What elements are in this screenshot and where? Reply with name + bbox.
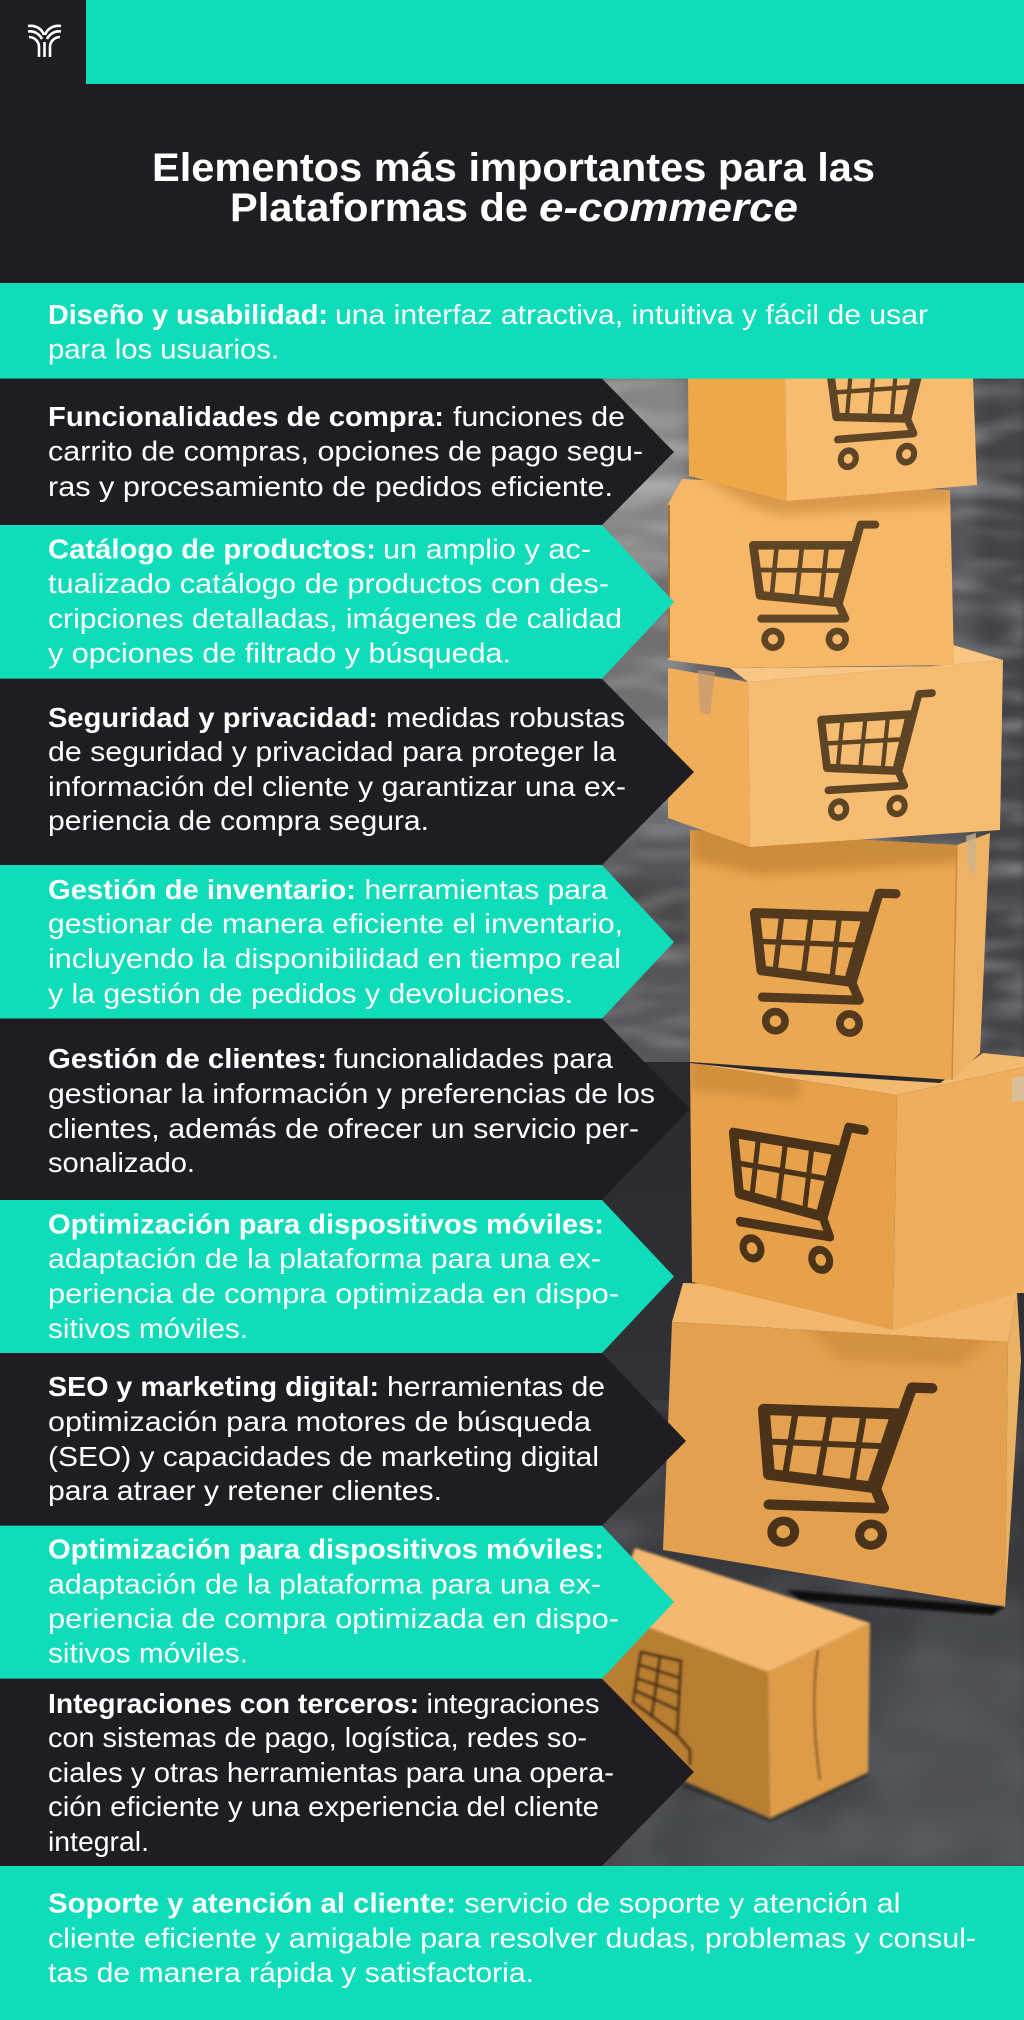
panel: SEO y marketing digital [0, 1353, 686, 1526]
box 3: box with cart facing right [668, 645, 1003, 847]
text: Diseño y usabilidad: Diseño y usabilidad: [48, 299, 328, 330]
text: Integraciones con terceros: con sistemas de pago, logística, redes so- [48, 1722, 587, 1753]
text: Optimización para dispositivos móviles (repetido): Optimización para dispositivos móviles: [48, 1534, 604, 1564]
text: Diseño y usabilidad: para los usuarios. [48, 334, 279, 365]
text: Integraciones con terceros [48, 1688, 614, 1857]
text: Optimización para dispositivos móviles (repetido): periencia de compra optimizada en dispo- [48, 1603, 619, 1634]
text: Optimización para dispositivos móviles: Optimización para dispositivos móviles: [48, 1209, 604, 1240]
panel: Gestión de inventario [0, 865, 674, 1018]
text: Catálogo de productos: cripciones detalladas, imágenes de calidad [48, 603, 622, 634]
photo background: blurred wood wall [590, 370, 1024, 1070]
text: SEO y marketing digital: optimización para motores de búsqueda [48, 1406, 592, 1437]
text: Soporte y atención al cliente: servicio de soporte y atención al [464, 1887, 900, 1918]
text: Catálogo de productos [48, 534, 622, 669]
title: Elementos más importantes para las [152, 146, 875, 190]
text: Gestión de clientes: sonalizado. [48, 1147, 195, 1178]
panel: Soporte y atención al cliente [0, 1866, 1024, 2020]
icon: cart on box 2 [753, 525, 875, 648]
shading under box 4 [690, 1064, 802, 1100]
text: Soporte y atención al cliente: Soporte y atención al cliente: [48, 1887, 456, 1918]
table haze [725, 1641, 1024, 1857]
text: Gestión de clientes: Gestión de clientes: [48, 1043, 327, 1074]
panel: Seguridad y privacidad [0, 679, 694, 865]
title: Plataformas de [230, 186, 528, 230]
icon: logo [28, 26, 61, 57]
text: SEO y marketing digital: (SEO) y capacidades de marketing digital [48, 1441, 599, 1472]
text: Gestión de inventario: y la gestión de pedidos y devoluciones. [48, 978, 573, 1009]
icon: cart on box 1 [827, 378, 922, 470]
text: Catálogo de productos: y opciones de filtrado y búsqueda. [48, 638, 511, 669]
text: Seguridad y privacidad: información del cliente y garantizar una ex- [48, 771, 626, 802]
text: Optimización para dispositivos móviles [48, 1209, 619, 1344]
title [152, 146, 875, 230]
panel: Catálogo de productos [0, 525, 674, 679]
text: Gestión de clientes [48, 1043, 655, 1178]
text: Seguridad y privacidad: medidas robustas [386, 702, 625, 733]
text: Optimización para dispositivos móviles: sitivos móviles. [48, 1313, 248, 1344]
box 5: second box from the bottom [690, 1050, 1024, 1330]
box 1: top box cropped by the band [688, 378, 977, 501]
text: Integraciones con terceros: integraciones [426, 1688, 600, 1719]
shading under box 5 [810, 1330, 986, 1365]
text: Optimización para dispositivos móviles: adaptación de la plataforma para una ex- [48, 1243, 601, 1274]
text: Gestión de clientes: clientes, además de ofrecer un servicio per- [48, 1113, 639, 1144]
text: Optimización para dispositivos móviles (repetido) [48, 1534, 619, 1669]
box 6: large bottom box [663, 1283, 1021, 1615]
panel: Funcionalidades de compra [0, 379, 674, 525]
text: Seguridad y privacidad: periencia de compra segura. [48, 805, 429, 836]
text: Seguridad y privacidad: de seguridad y privacidad para proteger la [48, 736, 617, 767]
text: Funcionalidades de compra: ras y procesamiento de pedidos eficiente. [48, 471, 613, 502]
text: Optimización para dispositivos móviles: periencia de compra optimizada en dispo- [48, 1278, 619, 1309]
wood grain streaks [600, 378, 1024, 1063]
header band: teal bar [86, 0, 1024, 84]
text: Funcionalidades de compra: Funcionalidades de compra: [48, 401, 444, 432]
text: Seguridad y privacidad [48, 702, 626, 836]
box 4: middle box [690, 820, 1000, 1080]
text: Catálogo de productos: tualizado catálogo de productos con des- [48, 568, 609, 599]
photo background: dark table [600, 1062, 1024, 1866]
icon: cart on box 3 [821, 693, 932, 819]
shading under box 1 [701, 480, 950, 518]
text: Optimización para dispositivos móviles (repetido): adaptación de la plataforma para una ex- [48, 1569, 601, 1600]
text: Gestión de clientes: gestionar la información y preferencias de los [48, 1078, 655, 1109]
text: Soporte y atención al cliente: tas de manera rápida y satisfactoria. [48, 1957, 534, 1988]
text: Optimización para dispositivos móviles (repetido): sitivos móviles. [48, 1638, 248, 1669]
text: Soporte y atención al cliente [48, 1887, 976, 1988]
text: Catálogo de productos: Catálogo de productos: [48, 534, 376, 564]
text: SEO y marketing digital: herramientas de [387, 1371, 605, 1402]
text: Funcionalidades de compra: funciones de [453, 401, 625, 432]
icon: cart on box 5 [731, 1108, 864, 1277]
box 2: second box from the top [668, 470, 960, 668]
text: Gestión de inventario: herramientas para [364, 874, 608, 905]
text: SEO y marketing digital: SEO y marketing digital: [48, 1371, 379, 1402]
text: Funcionalidades de compra [48, 401, 643, 502]
panel: Optimización para dispositivos móviles [0, 1200, 674, 1353]
text: Gestión de inventario: gestionar de manera eficiente el inventario, [48, 908, 623, 939]
shadow beneath box 6 [787, 1590, 1005, 1615]
text: Integraciones con terceros: ción eficiente y una experiencia del cliente [48, 1791, 599, 1822]
photo: stacked cardboard boxes with cart icons [590, 340, 1024, 1870]
panel: Optimización para dispositivos móviles (repetido) [0, 1526, 674, 1679]
text: SEO y marketing digital: para atraer y retener clientes. [48, 1475, 442, 1506]
title: e-commerce [539, 186, 798, 230]
text: Catálogo de productos: un amplio y ac- [383, 534, 591, 564]
panel: Gestión de clientes [0, 1018, 690, 1200]
text: Funcionalidades de compra: carrito de compras, opciones de pago segu- [48, 436, 643, 466]
icon: cart on box 6 [756, 1383, 932, 1547]
box 7: fallen box in the foreground [600, 1548, 870, 1822]
text: Integraciones con terceros: ciales y otras herramientas para una opera- [48, 1757, 614, 1788]
text: Gestión de inventario [48, 874, 623, 1009]
text: Soporte y atención al cliente: cliente eficiente y amigable para resolver dudas, problemas y consul- [48, 1922, 976, 1954]
text: Diseño y usabilidad [48, 299, 928, 365]
table texture [600, 1400, 1024, 1866]
text: Gestión de clientes: funcionalidades para [334, 1043, 614, 1074]
icon: cart on box 4 [753, 889, 896, 1034]
text: Integraciones con terceros: Integraciones con terceros: [48, 1688, 419, 1719]
text: Diseño y usabilidad: una interfaz atractiva, intuitiva y fácil de usar [335, 299, 928, 330]
panel: Diseño y usabilidad [0, 283, 1024, 379]
text: Gestión de inventario: Gestión de inventario: [48, 874, 356, 905]
text: Seguridad y privacidad: Seguridad y privacidad: [48, 702, 378, 733]
text: Integraciones con terceros: integral. [48, 1826, 149, 1857]
shading under box 3 [690, 830, 956, 878]
icon: partial cart on fallen box [633, 1652, 690, 1765]
panel: Integraciones con terceros [0, 1679, 694, 1866]
text: Gestión de inventario: incluyendo la disponibilidad en tiempo real [48, 943, 621, 974]
text: SEO y marketing digital [48, 1371, 605, 1506]
